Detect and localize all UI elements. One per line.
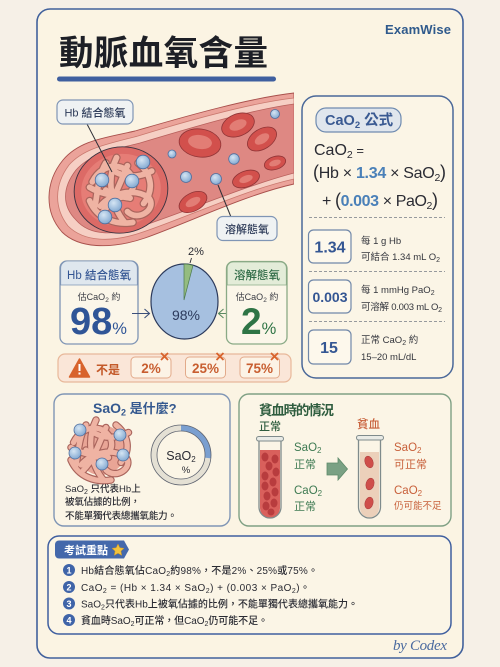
anemia values: 可正常 bbox=[394, 458, 427, 471]
point 2: 2 bbox=[66, 582, 72, 592]
pie chart: 98% vs 2% bbox=[151, 246, 218, 339]
constant 1.34: 每 1 g Hb bbox=[361, 235, 401, 247]
pie chart: 98% vs 2%: 98% bbox=[172, 307, 200, 323]
anemia values: 2 bbox=[418, 489, 423, 498]
normal values: 正常 bbox=[294, 500, 316, 513]
point 2: CaO bbox=[81, 583, 102, 594]
point 1 bbox=[63, 564, 318, 578]
constant 1.34: 可結合 1.34 mL O bbox=[361, 252, 436, 263]
title: 動脈血氧含量 bbox=[59, 35, 268, 73]
heading: 是什麼? bbox=[126, 401, 177, 416]
point 1: Hb結合態氧佔CaO bbox=[81, 566, 166, 577]
point 4: 貧血時SaO bbox=[81, 616, 131, 627]
description: 只代表Hb上 bbox=[88, 483, 141, 495]
panel: dissolved 2%: 2 bbox=[263, 297, 267, 304]
anemia values: CaO bbox=[394, 485, 418, 497]
warning bar: not 2%, 25%, 75%: 不是 bbox=[96, 363, 120, 377]
formula text: + (0.003 × PaO bbox=[322, 190, 427, 210]
panel: Hb bound 98%: Hb 結合態氧 bbox=[67, 268, 131, 282]
bound oxygen molecules bbox=[95, 155, 150, 224]
point 3: SaO bbox=[81, 600, 101, 610]
point 4: 4 bbox=[66, 616, 72, 626]
tube: anemia bbox=[356, 436, 384, 518]
constant 15: 15–20 mL/dL bbox=[361, 352, 416, 363]
constant 1.34: 2 bbox=[436, 257, 440, 264]
warning bar: not 2%, 25%, 75% bbox=[58, 353, 291, 382]
panel: Hb bound 98% bbox=[60, 261, 138, 344]
constant 0.003: 2 bbox=[438, 307, 442, 314]
pie chart: 98% vs 2%: 2% bbox=[188, 246, 204, 258]
icon: hemoglobin knot bbox=[69, 420, 129, 481]
panel: dissolved 2% bbox=[226, 262, 287, 344]
artery lumen bbox=[66, 104, 294, 233]
label: 溶解態氧: 溶解態氧 bbox=[225, 222, 269, 236]
point 2: )。 bbox=[296, 583, 310, 594]
point 1: 1 bbox=[66, 566, 72, 576]
point 4: 可正常，但CaO bbox=[134, 614, 205, 627]
point 4: 2 bbox=[204, 621, 208, 628]
point 3: 2 bbox=[101, 604, 105, 612]
normal values: CaO bbox=[294, 485, 318, 497]
arrow: normal to anemia bbox=[327, 458, 348, 480]
formula text bbox=[313, 142, 446, 212]
point 4: 仍可能不足。 bbox=[208, 614, 268, 627]
anemia values: SaO bbox=[394, 442, 417, 454]
constant 15: 正常 CaO bbox=[361, 335, 402, 346]
point 3: 只代表Hb上被氧佔據的比例，不能單獨代表總攜氧能力。 bbox=[105, 598, 358, 610]
formula text: 2 bbox=[427, 200, 433, 212]
label line: dissolved oxygen bbox=[218, 185, 231, 217]
brand: ExamWise: ExamWise bbox=[385, 22, 451, 37]
red blood cells bbox=[178, 112, 286, 213]
artery wall bbox=[49, 93, 294, 246]
formula text: 2 bbox=[347, 149, 353, 161]
panel: Hb bound 98%: 約 bbox=[109, 291, 120, 302]
panel: dissolved 2%: 2% bbox=[241, 301, 277, 342]
normal values: 2 bbox=[317, 446, 322, 455]
panel: Hb bound 98%: 估CaO bbox=[78, 292, 105, 302]
option: 2%: 2% bbox=[141, 361, 161, 376]
signature: by Codex: by Codex bbox=[393, 638, 447, 654]
formula text: CaO bbox=[314, 142, 347, 159]
formula text: ) bbox=[440, 162, 446, 182]
label: Hb 結合態氧 bbox=[57, 100, 133, 124]
description bbox=[65, 483, 177, 522]
option: 75%: 75% bbox=[246, 361, 273, 376]
point 2: 2 bbox=[292, 588, 296, 595]
formula heading: 公式 bbox=[360, 112, 394, 129]
constant 0.003: 2 bbox=[431, 290, 435, 297]
anemia values bbox=[394, 442, 442, 512]
point 3: 3 bbox=[66, 599, 72, 609]
tube: normal bbox=[256, 436, 284, 518]
point 2: 2 bbox=[206, 588, 210, 595]
formula text: ) bbox=[432, 190, 438, 210]
heading: 貧血時的情況 bbox=[259, 402, 334, 418]
constant 1.34: 1.34 bbox=[314, 240, 346, 256]
description: 不能單獨代表總攜氧能力。 bbox=[65, 510, 177, 522]
arrow: dissolved to pie bbox=[218, 309, 235, 318]
panel: exam key points bbox=[48, 536, 451, 634]
heading: 2 bbox=[121, 408, 126, 418]
normal values: SaO bbox=[294, 442, 317, 454]
label: Hb 結合態氧: Hb 結合態氧 bbox=[64, 106, 126, 120]
point 3 bbox=[63, 598, 358, 612]
point 2: ) + (0.003 × PaO bbox=[210, 583, 292, 594]
panel: what is SaO2 bbox=[54, 394, 230, 526]
hemoglobin knot bbox=[90, 158, 152, 223]
donut chart: SaO2 percent: 2 bbox=[191, 455, 196, 464]
normal values: 2 bbox=[318, 489, 323, 498]
donut chart: SaO2 percent: SaO bbox=[166, 449, 191, 463]
formula text: = bbox=[353, 143, 364, 158]
dissolved oxygen molecules bbox=[168, 110, 280, 184]
constant 15: 15 bbox=[320, 340, 338, 357]
panel: Hb bound 98%: 98% bbox=[70, 301, 127, 343]
option: 25% bbox=[186, 353, 226, 378]
anemia values: 仍可能不足 bbox=[394, 500, 442, 512]
icon: warning triangle bbox=[70, 359, 90, 377]
label: 溶解態氧 bbox=[217, 216, 277, 240]
ribbon heading: 考試重點 bbox=[64, 543, 108, 557]
formula heading bbox=[316, 108, 401, 132]
panel: CaO2 formula bbox=[302, 96, 453, 378]
panel: dissolved 2%: 約 bbox=[267, 291, 278, 302]
constant 0.003: 每 1 mmHg PaO bbox=[361, 285, 431, 296]
panel: anemia situation bbox=[239, 394, 451, 526]
option: 2% bbox=[131, 353, 171, 378]
illustration: artery bbox=[49, 93, 294, 246]
point 2 bbox=[63, 581, 310, 595]
dashed dividers bbox=[309, 218, 445, 322]
anemia label: 貧血 bbox=[357, 417, 380, 431]
formula heading: 2 bbox=[355, 120, 360, 131]
heading: SaO bbox=[93, 400, 121, 416]
constant 0.003: 0.003 bbox=[312, 289, 348, 305]
point 4 bbox=[63, 614, 268, 628]
constant 15: 2 bbox=[402, 340, 406, 347]
panel: Hb bound 98%: 2 bbox=[105, 297, 109, 304]
point 4: 2 bbox=[131, 621, 135, 628]
normal label: 正常 bbox=[259, 419, 281, 433]
constant 0.003: 可溶解 0.003 mL O bbox=[361, 302, 438, 313]
description: SaO bbox=[65, 484, 84, 495]
option: 25%: 25% bbox=[192, 361, 219, 376]
normal values: 正常 bbox=[294, 458, 316, 471]
ribbon heading bbox=[55, 540, 129, 558]
option: 75% bbox=[240, 353, 280, 378]
panel: dissolved 2%: 估CaO bbox=[236, 292, 263, 302]
description: 2 bbox=[84, 489, 88, 496]
formula heading: CaO bbox=[325, 113, 355, 129]
point 1: 2 bbox=[166, 571, 170, 578]
panel: dissolved 2%: 溶解態氧 bbox=[234, 268, 280, 282]
point 2: = (Hb × 1.34 × SaO bbox=[107, 583, 205, 594]
cross-section red cell bbox=[74, 146, 168, 234]
donut chart: SaO2 percent bbox=[151, 425, 211, 485]
constant 15 bbox=[308, 330, 418, 364]
description: 被氧佔據的比例， bbox=[65, 496, 140, 508]
label line: Hb bound oxygen bbox=[87, 124, 112, 172]
anemia values: 2 bbox=[417, 446, 422, 455]
point 2: 2 bbox=[103, 588, 107, 595]
formula text: (Hb × 1.34 × SaO bbox=[313, 162, 435, 182]
icon: star bbox=[112, 544, 124, 555]
constant 0.003 bbox=[308, 280, 442, 314]
donut chart: SaO2 percent: % bbox=[182, 465, 191, 476]
normal values bbox=[294, 442, 323, 513]
point 1: 約98%，不是2%、25%或75%。 bbox=[170, 564, 318, 577]
constant 1.34 bbox=[308, 230, 440, 264]
formula text: 2 bbox=[434, 172, 440, 184]
arrow: Hb to pie bbox=[132, 309, 150, 318]
constant 15: 約 bbox=[406, 334, 418, 346]
